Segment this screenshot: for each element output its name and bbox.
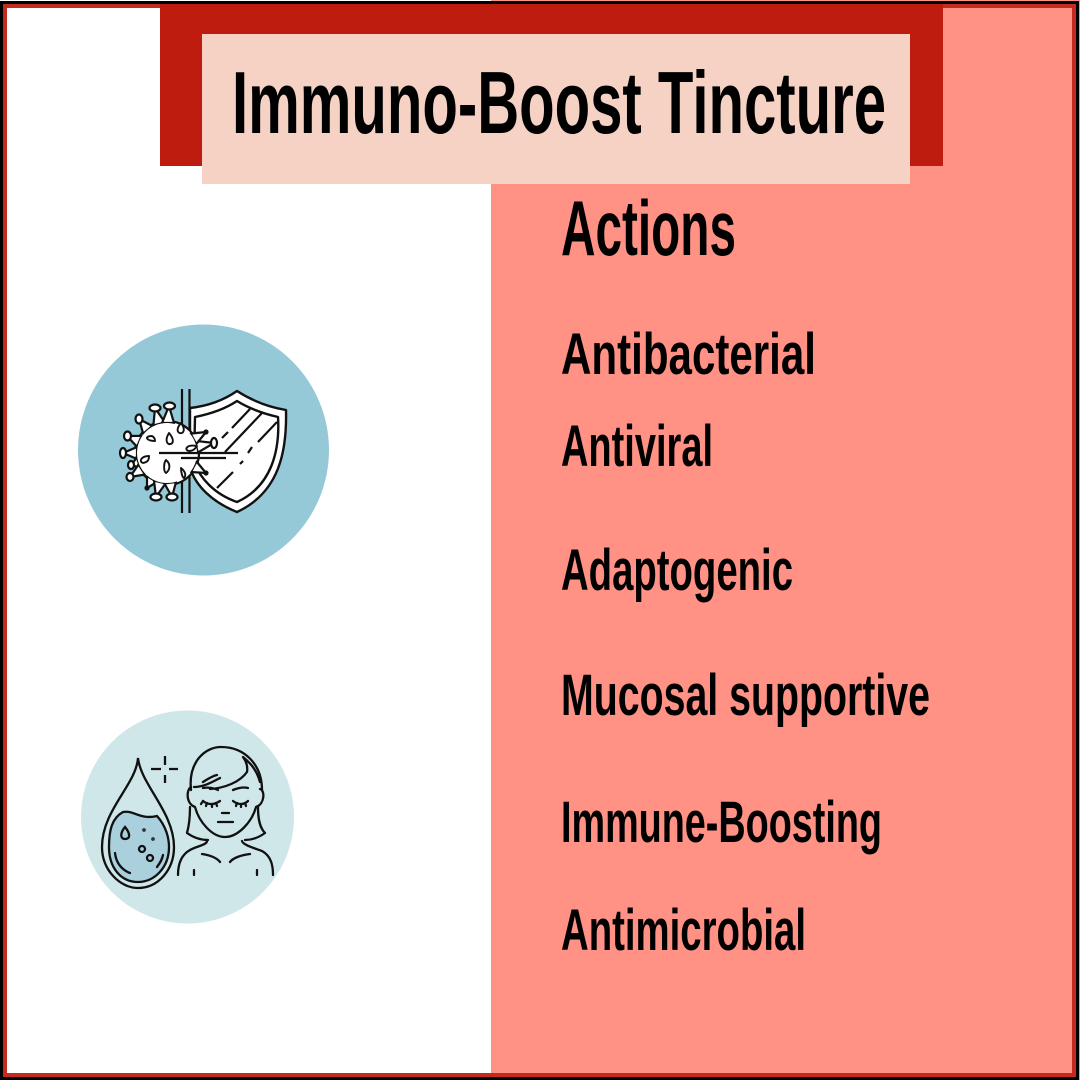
icon background circle: [78, 324, 329, 576]
droplet: [102, 758, 174, 888]
panel: right salmon column: [491, 0, 1080, 1080]
item: Antiviral: Antiviral: [561, 414, 713, 479]
icon: virus against shield: [78, 324, 329, 576]
item: Adaptogenic: Adaptogenic: [561, 538, 793, 603]
icon background circle: [81, 710, 294, 924]
actions list: [561, 184, 930, 963]
heading: Actions: Actions: [561, 184, 736, 272]
banner: peach plate: [202, 34, 910, 184]
item: Immune-Boosting: Immune-Boosting: [561, 790, 882, 855]
shield: [190, 391, 286, 512]
streak lines: [159, 453, 238, 458]
item: Antibacterial: Antibacterial: [561, 322, 816, 387]
virus: [120, 402, 217, 500]
woman portrait: [178, 747, 273, 875]
banner: red backing: [160, 4, 943, 166]
sparkle: [151, 756, 178, 783]
barrier lines: [182, 389, 190, 513]
icon: droplet and face: [81, 710, 294, 924]
title banner: [160, 4, 943, 184]
item: Antimicrobial: Antimicrobial: [561, 898, 806, 963]
